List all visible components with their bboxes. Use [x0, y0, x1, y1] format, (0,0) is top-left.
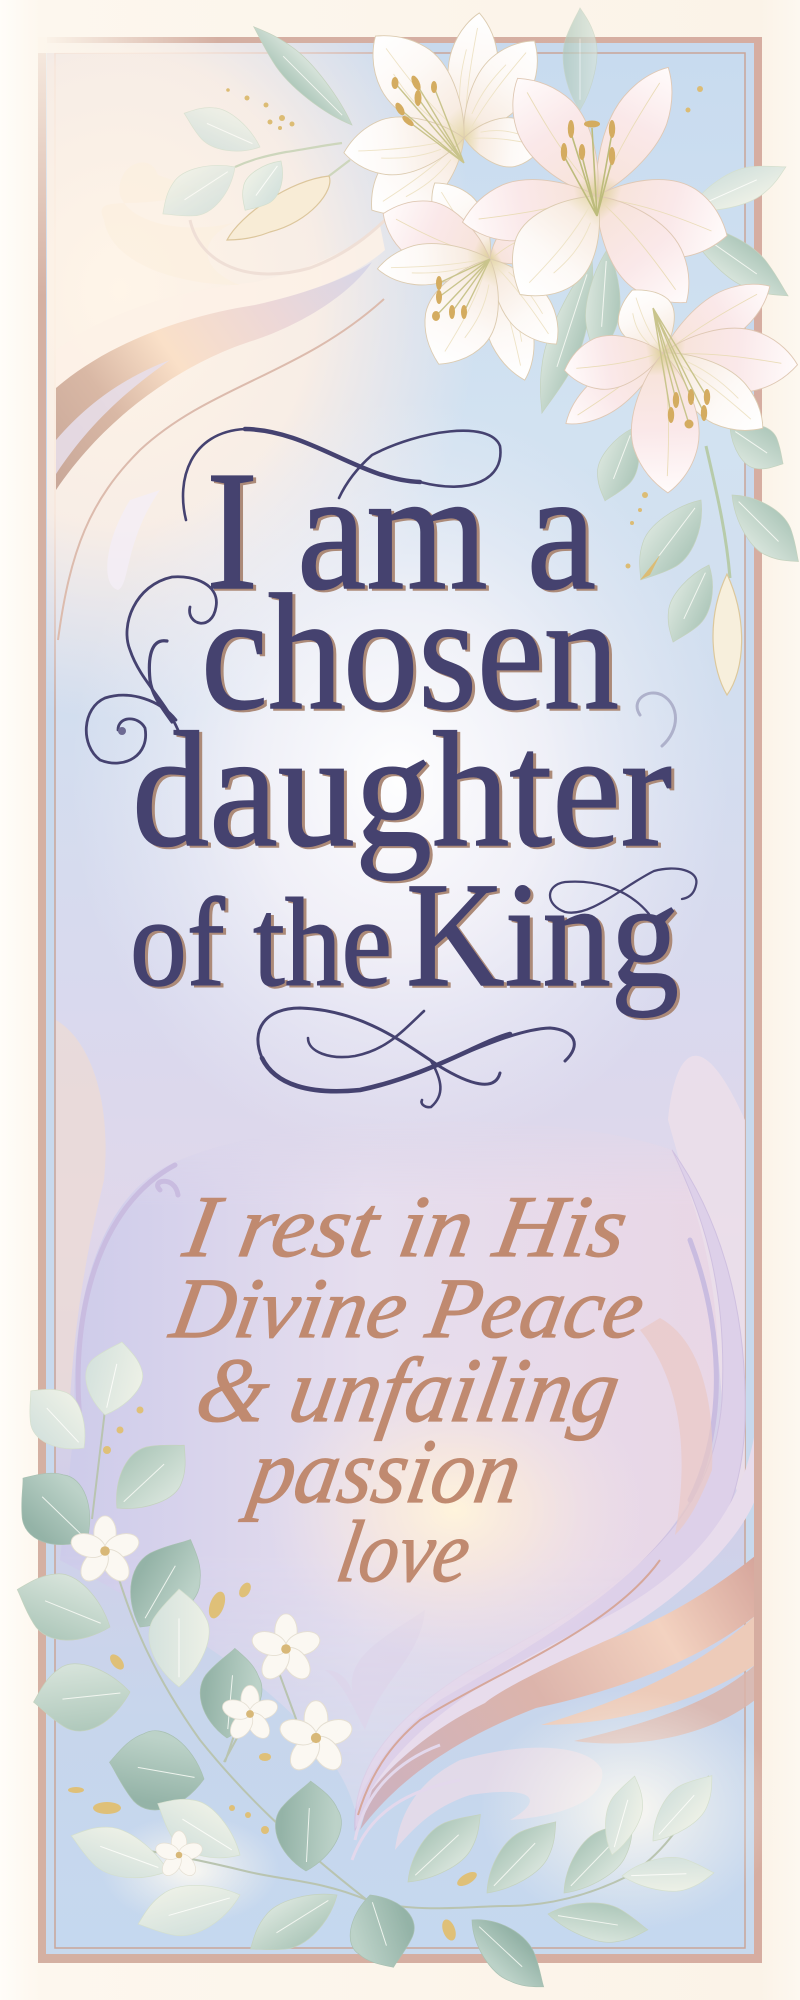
- fan strokes: [350, 1744, 440, 1860]
- rose band upper: [360, 1556, 755, 1830]
- heading line 1: I am a: [206, 436, 596, 625]
- heading line 3: daughter: [132, 698, 672, 881]
- flourish: above heading: [183, 429, 500, 520]
- script text: [164, 1179, 651, 1601]
- script line 3: & unfailing: [189, 1340, 627, 1442]
- central white glow: [70, 400, 730, 1160]
- lily: lower left: [371, 170, 574, 386]
- script line 4: passion: [238, 1421, 529, 1523]
- flourish: left of heading: [86, 577, 216, 763]
- warm glow behind script text: [265, 1360, 645, 1660]
- script line 2: Divine Peace: [164, 1261, 651, 1356]
- decorative swirl: lower heart-shaped lavender wave: [56, 1020, 755, 1860]
- thin rose line: [358, 1560, 660, 1815]
- flourish: faint right spiral: [637, 693, 676, 746]
- flourish: right of King: [550, 869, 696, 914]
- right crescent: [668, 1056, 745, 1520]
- flourish: below heading: [258, 1008, 574, 1107]
- heart edges: [78, 1165, 716, 1500]
- stems and buds: [227, 143, 742, 695]
- heading line 4 King: King: [406, 852, 679, 1018]
- left crescents: [56, 1020, 106, 1400]
- stems: [92, 1410, 709, 1908]
- leaves: [151, 8, 800, 650]
- lily: upper left: [340, 10, 556, 234]
- lily: right: [555, 267, 800, 494]
- flower arrangement: top right lilies: [151, 8, 800, 695]
- script line 5: love: [331, 1504, 478, 1601]
- heading: [130, 436, 679, 1018]
- white blossoms: [68, 1516, 355, 1879]
- rose wash: [640, 1318, 712, 1535]
- heading line 2: chosen: [201, 560, 619, 744]
- script line 1: I rest in His: [176, 1179, 635, 1276]
- pale glow near lower left blossom: [100, 1815, 280, 1925]
- small lavender heart tip: [325, 1610, 425, 1730]
- rose band tail: [541, 1616, 755, 1725]
- gold flecks top: [226, 86, 703, 580]
- gold flecks: [68, 1406, 479, 1942]
- lavender ribbon: [355, 1150, 745, 1830]
- leaves: [0, 1336, 726, 2000]
- frame fade at top left: [38, 37, 218, 297]
- lily: main pink: [457, 55, 738, 324]
- heart wave: [60, 1121, 718, 1810]
- foliage: bottom left branch: [0, 1336, 726, 2000]
- pale curl: [395, 1748, 602, 1850]
- pale ribbon: [365, 1432, 755, 1800]
- heading line 4 start: of the: [130, 874, 392, 1013]
- top-left peach light: [47, 43, 444, 690]
- rose band lower: [574, 1665, 755, 1744]
- decorative swirl: top left bands: [56, 162, 400, 640]
- pale corner glow lower right: [480, 1690, 780, 1930]
